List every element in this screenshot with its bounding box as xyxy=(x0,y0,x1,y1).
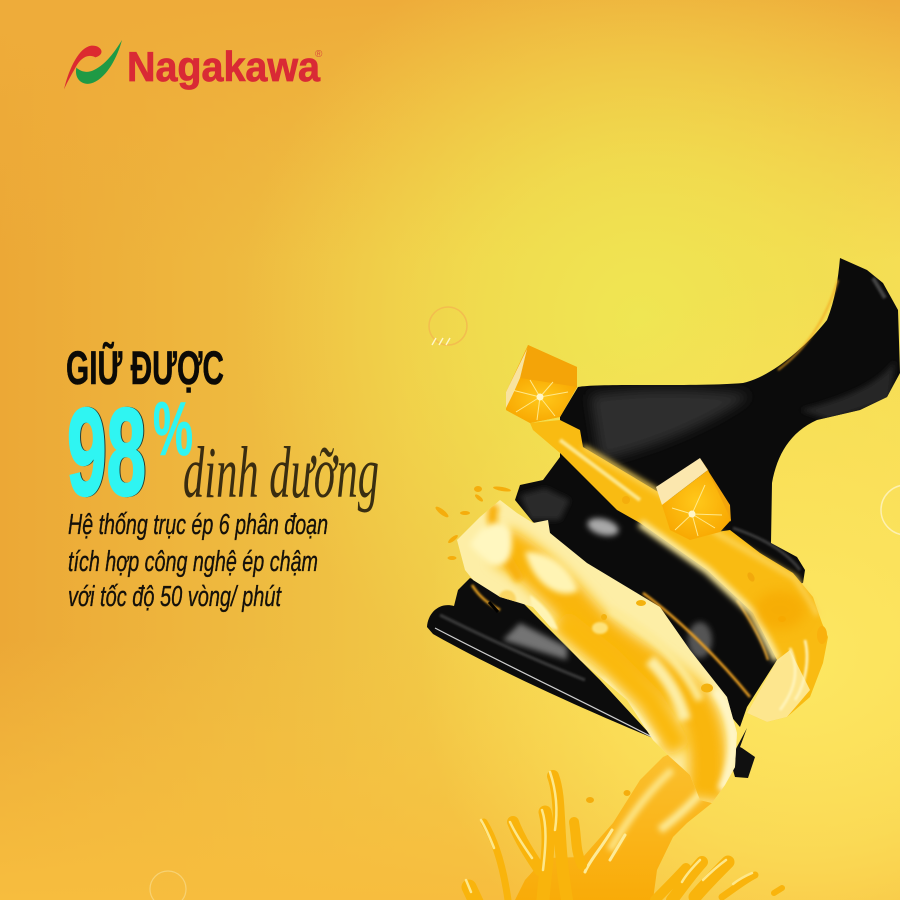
auger: funnel spout and body xyxy=(515,258,900,727)
body text: tích hợp công nghệ ép chậm xyxy=(68,546,318,578)
bubbles xyxy=(150,307,900,900)
product: juicer auger with juice xyxy=(427,258,900,900)
juice droplets xyxy=(434,485,630,803)
body text: với tốc độ 50 vòng/ phút xyxy=(68,581,282,613)
auger: shading xyxy=(520,278,895,697)
juice ribbon: lower xyxy=(457,500,737,803)
heading: GIỮ ĐƯỢC: GIỮ ĐƯỢC xyxy=(66,341,224,394)
stat: 98 percent: % xyxy=(153,387,193,472)
juice splash highlights xyxy=(466,772,752,892)
orange cube: upper xyxy=(506,345,577,423)
logo: Nagakawa xyxy=(64,40,323,90)
logo wordmark: Nagakawa xyxy=(127,43,321,90)
bubble: bottom xyxy=(150,871,186,900)
juice stream xyxy=(515,740,735,900)
bubble: upper xyxy=(429,307,467,345)
body text: Hệ thống trục ép 6 phân đoạn xyxy=(68,509,328,541)
stat: 98 percent: 98 xyxy=(67,384,146,522)
bubble: right edge xyxy=(881,485,900,535)
orange cube: lower xyxy=(656,458,731,540)
stat: 98 percent: 98 xyxy=(68,384,147,522)
auger: base plate xyxy=(427,578,755,778)
body text xyxy=(68,509,328,613)
juice splash fingers xyxy=(469,776,782,900)
script text: dinh dưỡng: dinh dưỡng xyxy=(183,432,379,513)
icon: logo swoosh xyxy=(64,40,122,89)
headline block xyxy=(66,341,379,613)
juice ribbon: upper xyxy=(530,420,828,722)
registered mark: ® xyxy=(315,49,323,60)
